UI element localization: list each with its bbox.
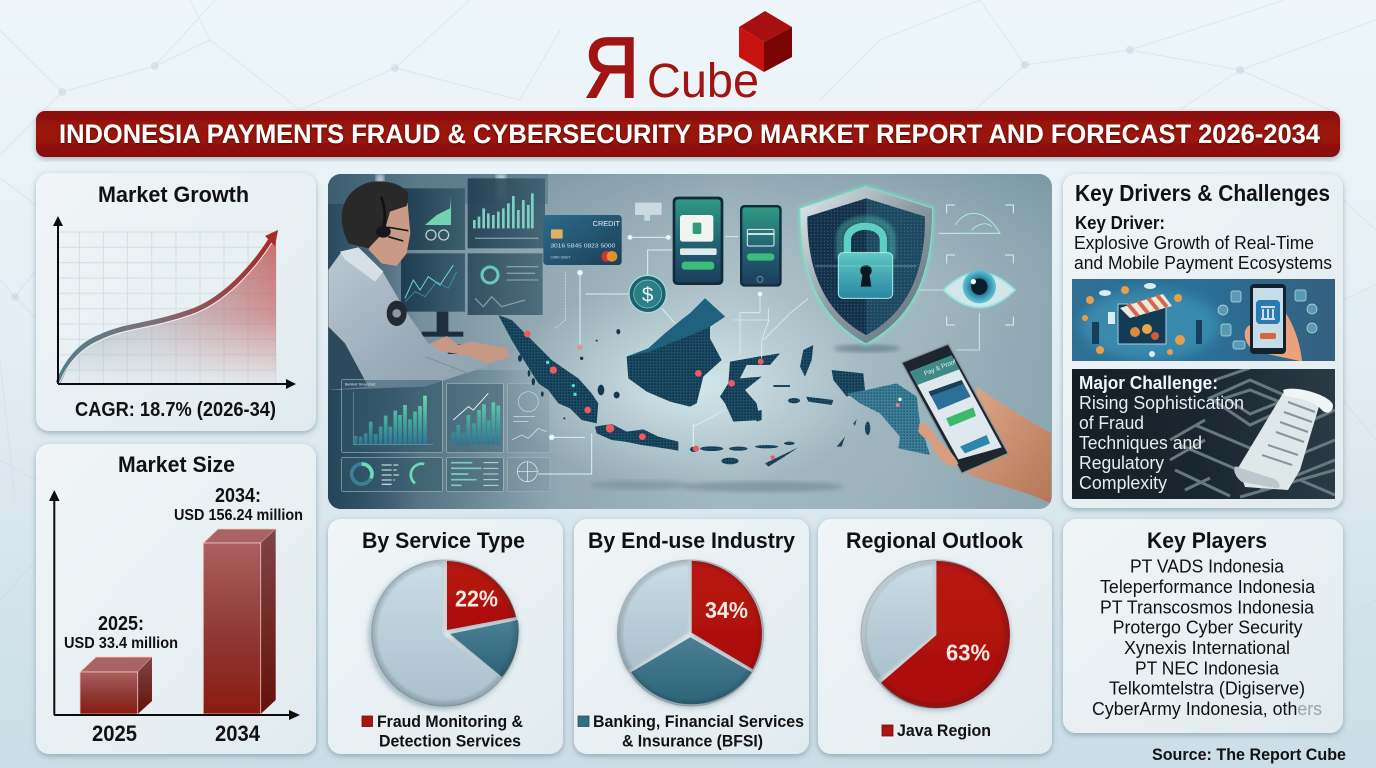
title banner: INDONESIA PAYMENTS FRAUD & CYBERSECURITY BPO MARKET REPORT AND FORECAST 2026-2034 <box>59 119 1320 149</box>
bar chart: market size <box>49 490 300 720</box>
heading: key drivers: Key Drivers & Challenges <box>1075 180 1330 206</box>
text: major challenge: Major Challenge: <box>1079 373 1218 393</box>
map: Kalimantan, Sulawesi, Papua <box>627 298 930 467</box>
text: major challenge: Regulatory <box>1079 453 1164 473</box>
logo mark letter: Я <box>584 21 639 116</box>
icon: eye scan <box>943 205 1015 325</box>
title banner <box>36 111 1340 157</box>
heading: key players: Key Players <box>1147 528 1267 553</box>
panel: market growth <box>36 173 316 431</box>
panel: key drivers and challenges <box>1063 174 1343 508</box>
map: Sumatra and Java <box>498 315 678 451</box>
connector lines <box>538 235 693 474</box>
heading: market growth: Market Growth <box>98 182 249 207</box>
icon: dollar coin <box>629 275 666 313</box>
icon: paper scroll <box>1234 389 1333 490</box>
pie chart: regional outlook: 63% <box>946 640 990 666</box>
list: key players <box>1092 556 1322 719</box>
label: 2025 value <box>64 612 178 652</box>
icon: hand holding phone <box>590 344 1051 503</box>
legend: fraud monitoring <box>362 712 523 751</box>
axis label: 2034: 2034 <box>215 721 261 746</box>
heading: regional outlook: Regional Outlook <box>846 528 1023 553</box>
operator figure <box>328 181 510 390</box>
text: key driver: and Mobile Payment Ecosystems <box>1074 253 1332 273</box>
text: major challenge: of Fraud <box>1079 413 1144 433</box>
line chart: growth curve <box>53 216 296 389</box>
panel: central illustration <box>328 174 1052 509</box>
icon: credit card: 3016 5845 0823 5000 <box>550 243 615 249</box>
logo word: Cube <box>647 55 759 108</box>
image: marketplace and mobile banking <box>1072 279 1335 361</box>
text: major challenge: Complexity <box>1079 473 1167 493</box>
heading: by service type: By Service Type <box>362 528 525 553</box>
icon: red cube <box>739 11 792 72</box>
pie chart: end-use industry: 34% <box>705 597 748 623</box>
logo <box>584 11 792 116</box>
list: key players: PT Transcosmos Indonesia <box>1100 596 1315 617</box>
heading: by end-use industry: By End-use Industry <box>588 528 795 553</box>
text: major challenge: Rising Sophistication <box>1079 393 1244 413</box>
label: 2034 value: USD 156.24 million <box>174 507 303 524</box>
panel: by service type <box>328 519 563 754</box>
pie chart: service type: 22% <box>455 586 498 612</box>
list: key players: Teleperformance Indonesia <box>1100 576 1316 597</box>
icon: hand holding phone: Pay & Proof <box>923 358 957 378</box>
icon: credit card: CREDIT <box>593 219 620 228</box>
dashboards <box>342 379 550 492</box>
icon: phone two <box>740 205 782 287</box>
label: 2025 value: 2025: <box>98 612 144 635</box>
text: major challenge: Techniques and <box>1079 433 1202 453</box>
list: key players: CyberArmy Indonesia, others <box>1092 698 1322 719</box>
dashboards: Behind Snapshot <box>345 382 376 387</box>
legend: BFSI <box>578 712 804 751</box>
text: major challenge <box>1079 373 1244 493</box>
text: key driver: Key Driver: <box>1075 213 1165 233</box>
list: key players: Protergo Cyber Security <box>1113 617 1303 638</box>
icon: phone one <box>673 197 723 285</box>
legend: BFSI: Banking, Financial Services <box>593 712 804 731</box>
text: key driver: Explosive Growth of Real-Time <box>1074 233 1314 253</box>
connector lines right <box>693 233 1000 447</box>
icon: phone in hand <box>1218 284 1317 361</box>
axis label: 2025: 2025 <box>92 721 137 746</box>
pie chart: service type <box>369 560 519 707</box>
icon: dollar coin: $ <box>642 284 654 307</box>
icon: credit card <box>543 215 622 265</box>
monitors <box>400 178 545 337</box>
icon: credit card: CARD DEBIT <box>550 256 570 260</box>
list: key players: Xynexis International <box>1124 637 1290 658</box>
list: key players: Telkomtelstra (Digiserve) <box>1109 678 1305 699</box>
label: 2034 value <box>174 484 303 524</box>
panel: market size <box>36 444 316 754</box>
panel: regional outlook <box>818 519 1052 754</box>
panel: by end-use industry <box>574 519 809 754</box>
text: CAGR: CAGR: 18.7% (2026-34) <box>75 399 276 421</box>
maze pattern <box>1170 368 1335 497</box>
source note: Source: The Report Cube <box>1152 745 1346 764</box>
pie chart: end-use industry <box>617 560 764 706</box>
label: 2025 value: USD 33.4 million <box>64 635 178 652</box>
pie chart: regional outlook <box>860 560 1010 708</box>
icon: security shield <box>800 187 933 352</box>
legend: java region: Java Region <box>897 721 991 740</box>
callout: major challenge <box>1072 368 1335 499</box>
legend: fraud monitoring: Fraud Monitoring & <box>377 712 523 731</box>
icon: chat bubble <box>635 203 662 221</box>
heading: market size: Market Size <box>118 452 235 477</box>
list: key players: PT VADS Indonesia <box>1130 556 1285 576</box>
legend: fraud monitoring: Detection Services <box>379 732 521 751</box>
icon: market stall <box>1118 294 1172 344</box>
panel: key players <box>1063 519 1343 733</box>
list: key players: PT NEC Indonesia <box>1135 657 1280 678</box>
text: key driver <box>1074 213 1332 273</box>
label: 2034 value: 2034: <box>215 484 261 507</box>
legend: BFSI: & Insurance (BFSI) <box>622 732 763 751</box>
